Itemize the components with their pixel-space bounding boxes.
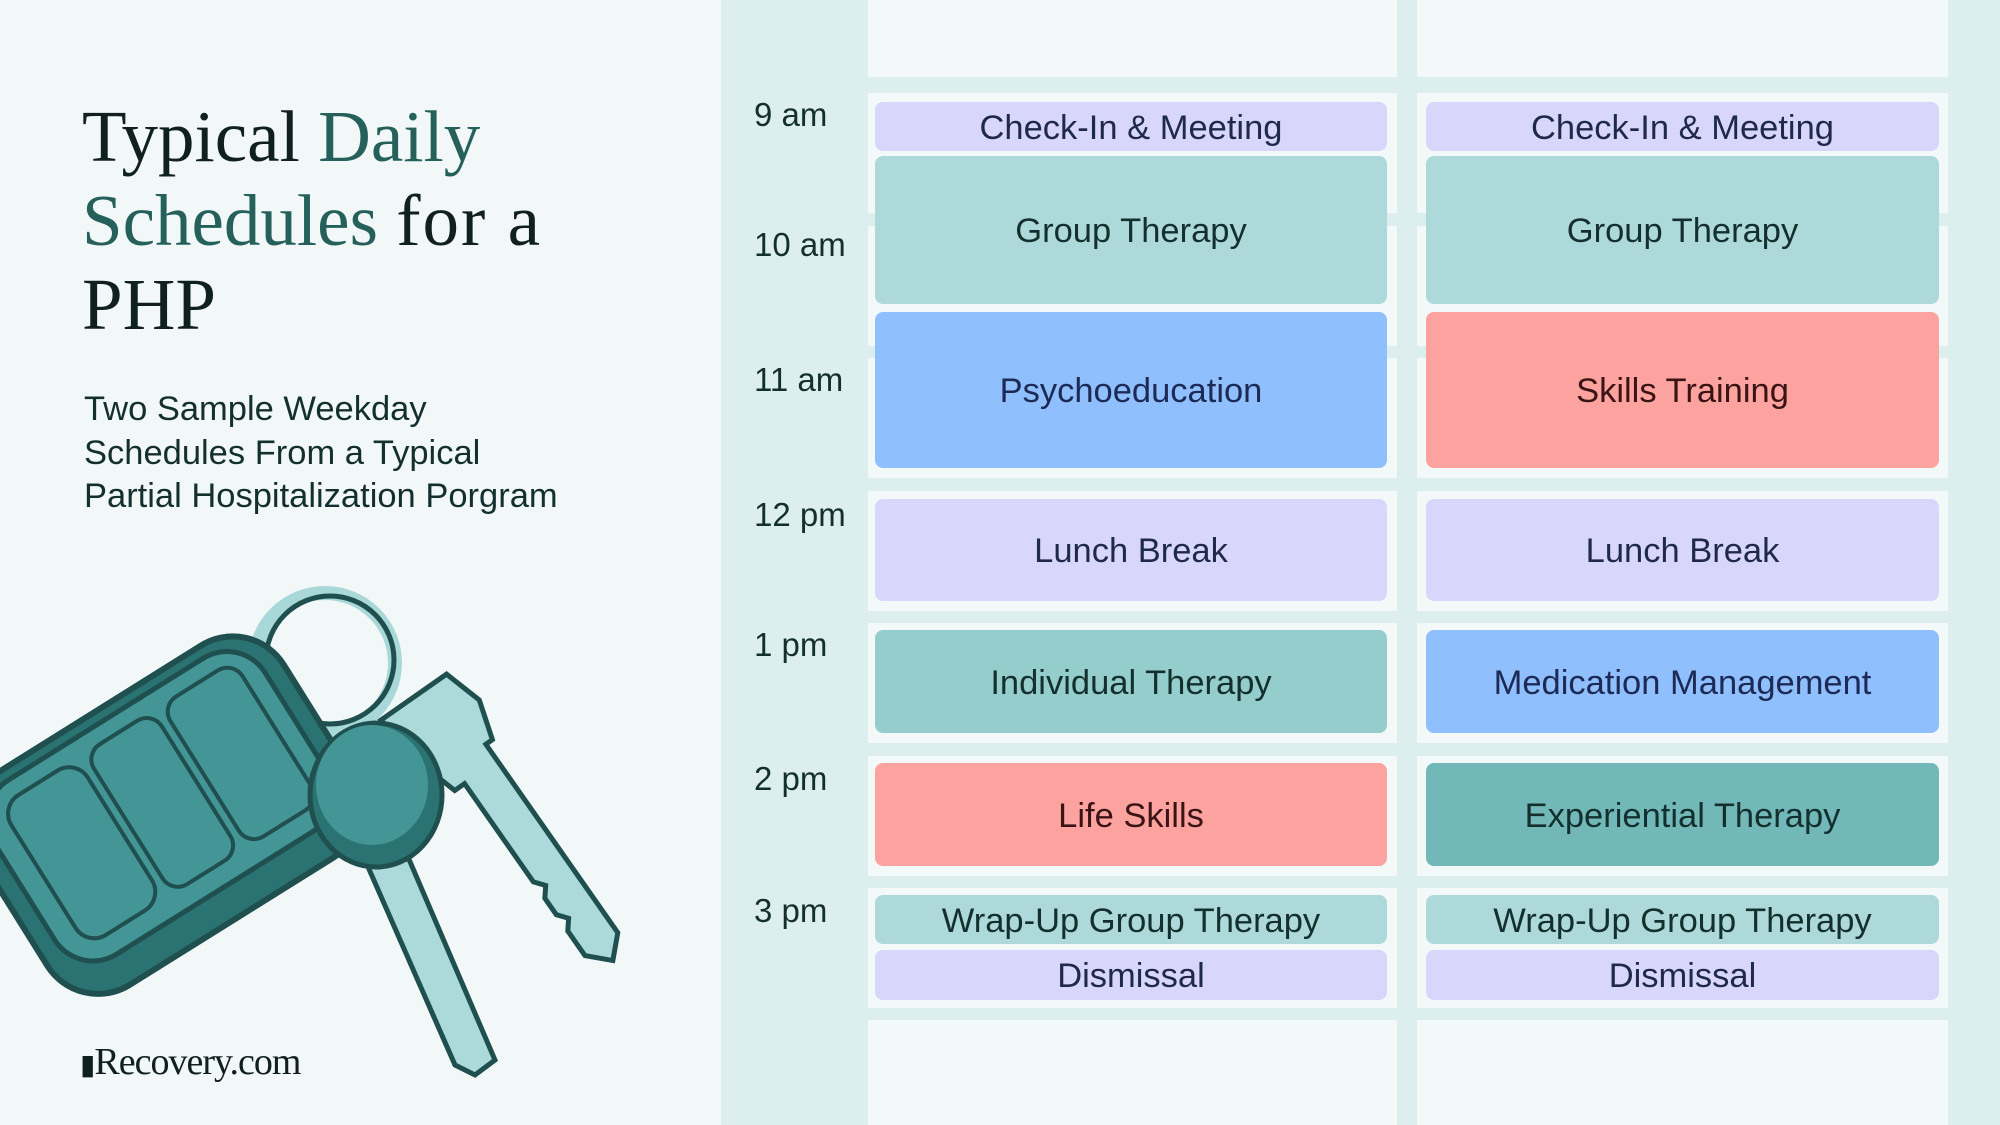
title: Schedules for a bbox=[82, 180, 542, 261]
illustration: car keys bbox=[0, 586, 620, 1078]
text: Lunch Break bbox=[1586, 532, 1779, 570]
text: Lunch Break bbox=[1034, 532, 1228, 570]
text: 11 am bbox=[754, 361, 843, 398]
text: Life Skills bbox=[1058, 796, 1204, 834]
text: Individual Therapy bbox=[990, 664, 1272, 702]
text: Experiential Therapy bbox=[1525, 796, 1840, 834]
text: Psychoeducation bbox=[1000, 372, 1262, 410]
dark key bbox=[310, 723, 495, 1075]
title bbox=[82, 96, 542, 345]
light key bbox=[381, 667, 646, 990]
text: Check-In & Meeting bbox=[1531, 108, 1834, 146]
schedule column 2 bbox=[1426, 102, 1939, 1000]
text: Dismissal bbox=[1057, 957, 1205, 995]
text: Group Therapy bbox=[1015, 212, 1247, 250]
logo: ▮Recovery.com bbox=[80, 1041, 300, 1083]
text: 12 pm bbox=[754, 496, 846, 533]
key ring bbox=[255, 593, 395, 733]
time labels: 9 am bbox=[754, 96, 827, 133]
text: 10 am bbox=[754, 226, 846, 263]
text: Skills Training bbox=[1576, 372, 1789, 410]
text: 3 pm bbox=[754, 892, 827, 929]
text: Check-In & Meeting bbox=[980, 108, 1282, 146]
title: Typical Daily bbox=[82, 96, 480, 177]
schedule column 1 bbox=[875, 102, 1387, 1000]
text: Group Therapy bbox=[1567, 212, 1798, 250]
title: PHP bbox=[82, 264, 216, 345]
text: 2 pm bbox=[754, 760, 827, 797]
subtitle: Partial Hospitalization Porgram bbox=[84, 477, 558, 515]
grid background bbox=[721, 0, 2000, 1125]
text: Wrap-Up Group Therapy bbox=[942, 902, 1320, 940]
text: Medication Management bbox=[1494, 664, 1871, 702]
text: Wrap-Up Group Therapy bbox=[1493, 902, 1872, 940]
subtitle: Schedules From a Typical bbox=[84, 434, 480, 472]
text: Dismissal bbox=[1609, 957, 1756, 995]
fob bbox=[0, 614, 384, 1017]
subtitle bbox=[84, 390, 558, 515]
text: 1 pm bbox=[754, 626, 827, 663]
subtitle: Two Sample Weekday bbox=[84, 390, 427, 428]
